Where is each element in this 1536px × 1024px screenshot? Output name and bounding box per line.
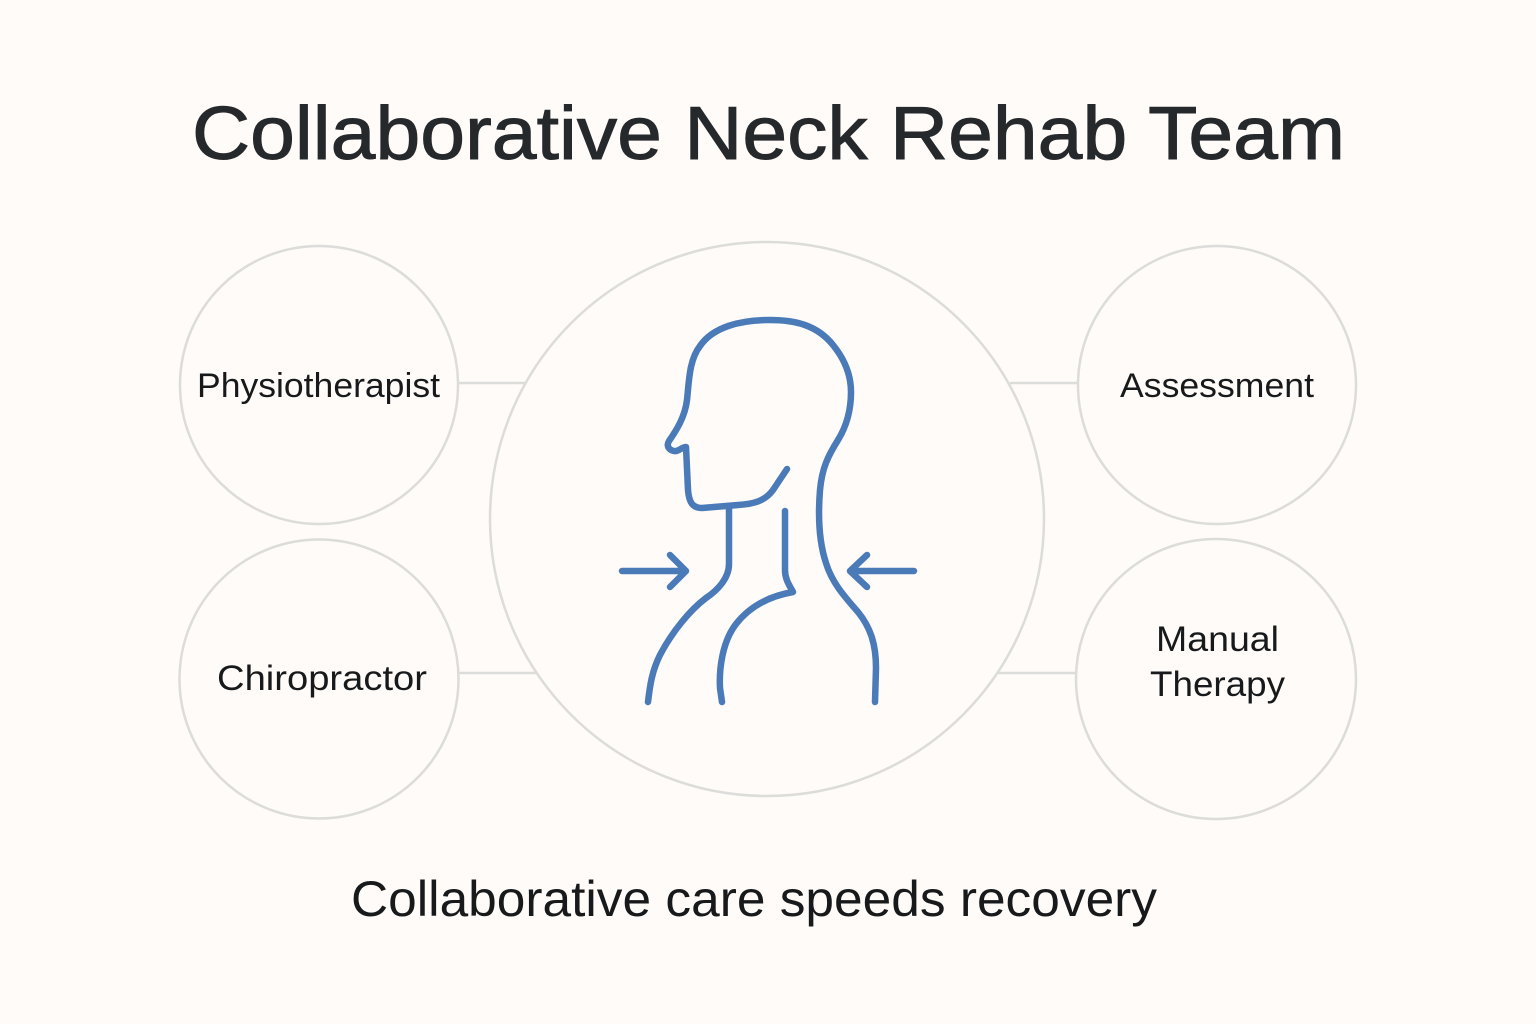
connector: chiropractor to center: [459, 672, 538, 674]
panel: central circle: [490, 242, 1044, 796]
arrow: right: [850, 555, 914, 587]
circle: chiropractor: Chiropractor: [217, 659, 427, 698]
arrow: left: [622, 555, 686, 587]
front of neck and left shoulder: [648, 507, 729, 702]
caption: Collaborative care speeds recovery: [351, 871, 1157, 927]
circle: manual therapy: Therapy: [1150, 665, 1286, 704]
circle: physiotherapist: [180, 246, 458, 524]
head outline and back of neck: [668, 320, 876, 702]
circle: manual therapy: [1076, 539, 1356, 819]
connector: assessment to center: [1010, 382, 1077, 384]
inner neck and shoulder: [720, 511, 793, 702]
connector: manual therapy to center: [998, 672, 1076, 674]
circle: physiotherapist: Physiotherapist: [197, 367, 441, 405]
circle: assessment: Assessment: [1120, 367, 1315, 405]
circle: chiropractor: [180, 540, 458, 818]
connector: physiotherapist to center: [459, 382, 525, 384]
title: Collaborative Neck Rehab Team: [192, 91, 1345, 175]
circle: assessment: [1078, 246, 1356, 524]
icon: head and neck profile with arrows: [622, 320, 914, 702]
circle: manual therapy: Manual: [1156, 620, 1279, 659]
